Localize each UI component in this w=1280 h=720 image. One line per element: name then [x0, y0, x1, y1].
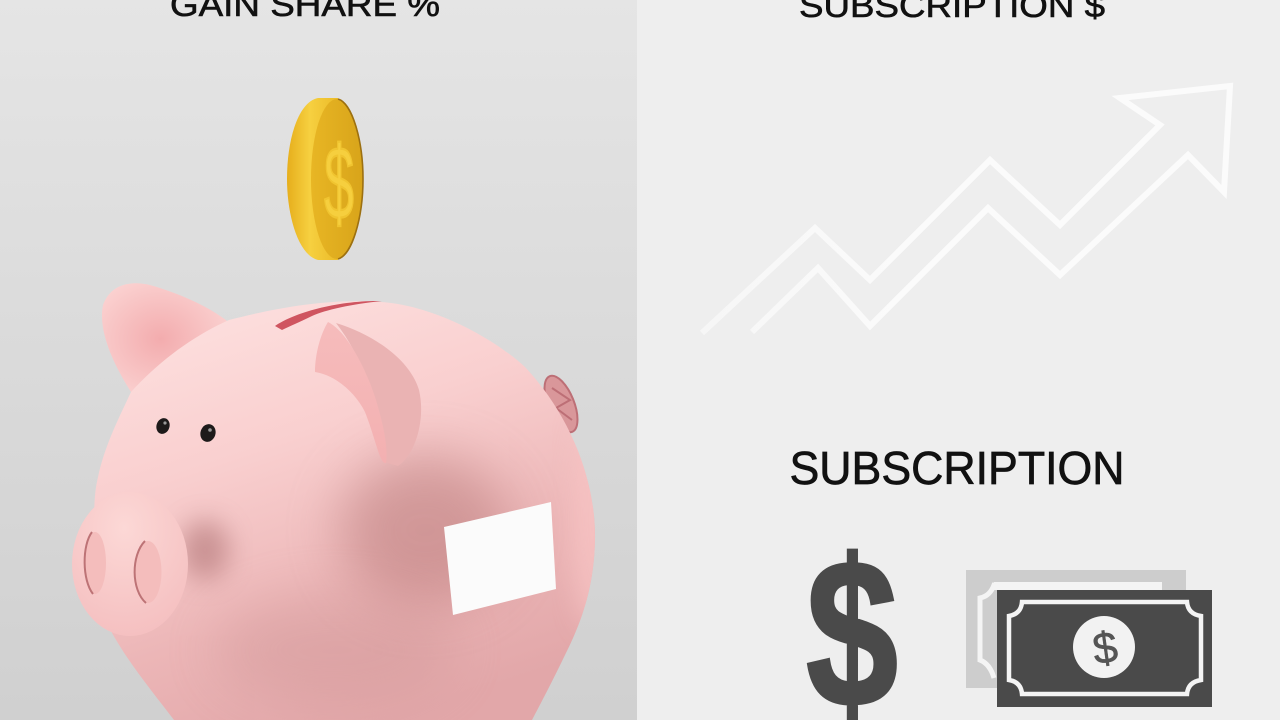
icon: banknotes — [966, 570, 1212, 707]
back banknote top band — [994, 582, 1162, 590]
front banknote — [997, 590, 1212, 707]
pig eyes — [154, 416, 218, 444]
pig far ear — [102, 283, 232, 395]
banknote medallion — [1073, 616, 1135, 678]
back banknote frame — [980, 585, 1162, 678]
panel: gain share background — [0, 0, 637, 720]
label: subscription: SUBSCRIPTION — [790, 442, 1124, 494]
illustration: piggy bank — [72, 283, 612, 720]
pig near ear — [315, 322, 421, 466]
chart arrow: growth line — [702, 86, 1230, 333]
pig body — [94, 301, 595, 720]
coin slot — [275, 301, 382, 330]
pig snout — [72, 492, 188, 636]
coin face — [311, 99, 363, 259]
coin rim — [287, 98, 338, 260]
coin edge — [338, 99, 363, 259]
front banknote frame — [1009, 602, 1201, 694]
banknote dollar: $ — [1090, 623, 1121, 674]
panel: subscription background — [637, 0, 1280, 720]
pig nostrils — [84, 532, 162, 603]
icon: gold coin — [287, 98, 363, 260]
blank label — [444, 502, 556, 615]
pig tail — [538, 371, 584, 437]
pig body shading — [179, 436, 595, 686]
back banknote — [966, 570, 1186, 688]
coin dollar: $ — [324, 126, 354, 242]
